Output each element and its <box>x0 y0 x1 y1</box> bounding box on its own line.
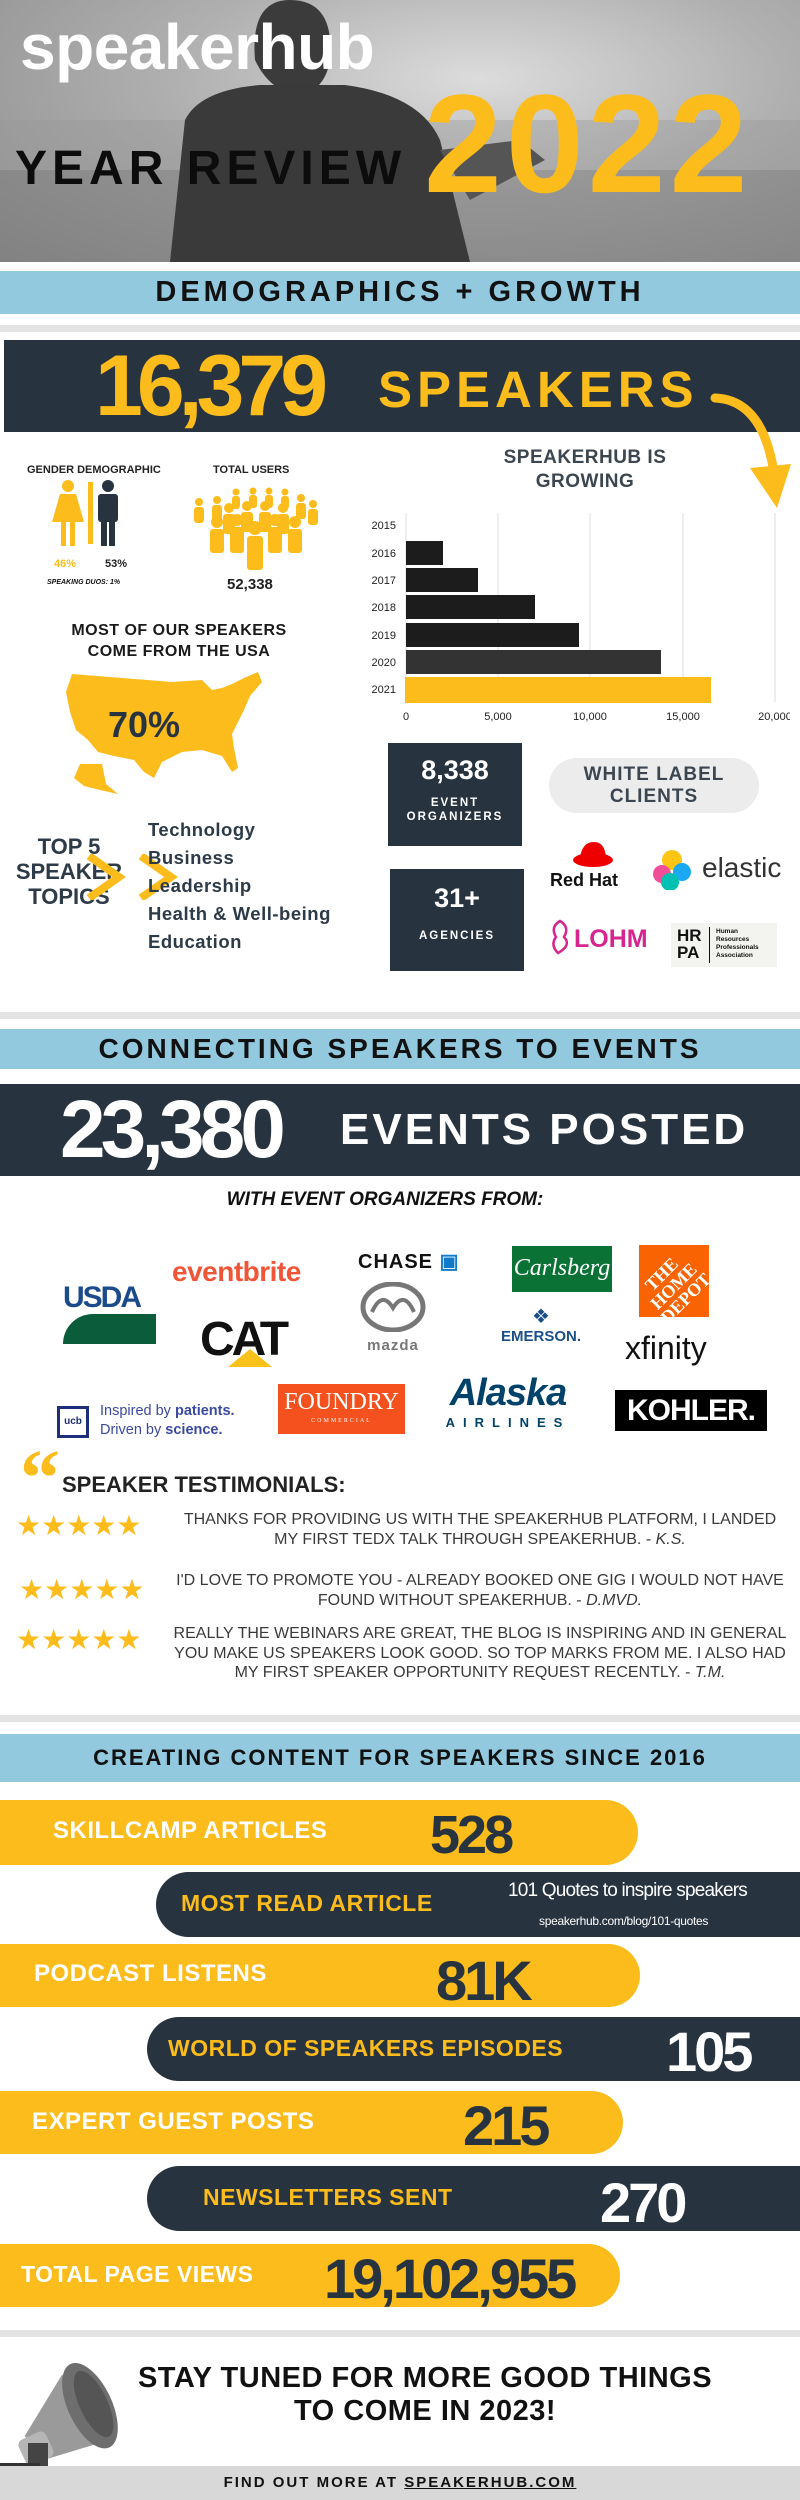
logo: lohm <box>552 920 648 954</box>
icon: crowd <box>194 488 318 570</box>
panel: gender demographic: SPEAKING DUOS: 1% <box>47 579 120 586</box>
chart title: SPEAKERHUB IS <box>504 447 666 468</box>
map: USA 70% <box>66 672 262 794</box>
logo: emerson: EMERSON. <box>501 1328 581 1345</box>
heading: most speakers from USA: COME FROM THE USA <box>88 643 270 660</box>
chart: speakerhub is growing: 2016 <box>372 548 396 560</box>
logo: hrpa: HR <box>677 926 702 945</box>
logo: hrpa: Human <box>716 928 738 935</box>
bar: podcast listens: 81K <box>436 1949 530 2012</box>
testimonial 3: YOU MAKE US SPEAKERS LOOK GOOD. SO TOP MARKS FROM ME. I ALSO HAD <box>174 1644 786 1662</box>
testimonial 1: MY FIRST TEDX TALK THROUGH SPEAKERHUB. - K.S. <box>274 1530 686 1548</box>
bar: total page views <box>0 2244 620 2307</box>
logo: alaska airlines: AIRLINES <box>446 1415 570 1430</box>
logo: speakerhub: speakerhub <box>20 11 374 83</box>
chart: speakerhub is growing: 2018 <box>372 602 396 614</box>
bar: most read article <box>156 1872 800 1937</box>
arrow: curved yellow <box>710 394 791 508</box>
logos: event organizers <box>57 1245 767 1438</box>
heading: with event organizers from: WITH EVENT ORGANIZERS FROM: <box>227 1189 543 1210</box>
chart: speakerhub is growing: 2020 <box>372 657 396 669</box>
bar: most read article: 101 Quotes to inspire speakers <box>508 1880 747 1901</box>
icon: megaphone <box>0 2363 118 2466</box>
icon: chevrons <box>86 854 178 900</box>
bar: most read article: speakerhub.com/blog/101-quotes <box>539 1914 708 1928</box>
stat box: event organizers: EVENT <box>431 797 479 809</box>
bar: podcast listens: PODCAST LISTENS <box>34 1960 267 1987</box>
logo: ucb: Driven by science. <box>100 1422 223 1438</box>
chart: speakerhub is growing: 15,000 <box>666 711 700 723</box>
title: year review: YEAR REVIEW <box>15 142 406 195</box>
logo: elastic: elastic <box>702 852 781 883</box>
chart: speakerhub is growing: 10,000 <box>573 711 607 723</box>
testimonial 3: MY FIRST SPEAKER OPPORTUNITY REQUEST RECENTLY. - T.M. <box>235 1664 725 1681</box>
heading: top 5: TOP 5 <box>38 834 100 859</box>
logo: red hat <box>550 842 618 890</box>
chart: speakerhub is growing: 2019 <box>372 630 396 642</box>
logo: kohler <box>615 1390 767 1431</box>
testimonial 3 <box>16 1624 786 1681</box>
chart: speakerhub is growing: 2017 <box>372 575 396 587</box>
heading: top 5: TOPICS <box>28 884 110 909</box>
list: topics <box>148 819 331 952</box>
logo: mazda <box>360 1282 426 1354</box>
events banner <box>0 1084 800 1176</box>
testimonial 2: ★★★★★ <box>19 1574 145 1605</box>
logo: lohm: LOHM <box>574 925 648 953</box>
heading: top 5 <box>16 834 122 909</box>
logo: usda: USDA <box>63 1281 140 1314</box>
bar: skillcamp articles: 528 <box>430 1805 511 1865</box>
bar: expert guest posts: 215 <box>463 2094 547 2157</box>
logo: eventbrite: eventbrite <box>172 1256 301 1287</box>
logo: elastic <box>653 850 781 890</box>
icon: woman and man <box>52 480 118 546</box>
panel: gender demographic: 46% <box>54 558 76 570</box>
logo: alaska airlines <box>446 1372 570 1430</box>
bar: newsletters sent: 270 <box>600 2171 684 2234</box>
testimonial 1: THANKS FOR PROVIDING US WITH THE SPEAKERHUB PLATFORM, I LANDED <box>184 1511 776 1528</box>
logo: foundry: COMMERCIAL <box>311 1418 372 1424</box>
stat box: event organizers: ORGANIZERS <box>407 811 503 823</box>
logo: home depot: HOME <box>646 1259 701 1313</box>
bar: expert guest posts <box>0 2091 623 2154</box>
testimonial 1: ★★★★★ <box>16 1510 142 1541</box>
panel: total users <box>194 464 318 593</box>
panel: total users: 52,338 <box>227 576 273 593</box>
callout: stay tuned: STAY TUNED FOR MORE GOOD THINGS <box>138 2362 712 2394</box>
bar: newsletters sent <box>147 2166 800 2231</box>
logo: home depot <box>639 1245 709 1317</box>
panel: total users: TOTAL USERS <box>213 464 289 476</box>
header photo <box>0 0 800 262</box>
footer <box>0 2466 800 2500</box>
speakers number: 16,379 <box>95 338 322 434</box>
logo: chase: CHASE ▣ <box>358 1251 459 1273</box>
icon: quote marks: “ <box>20 1435 60 1523</box>
logo: red hat: Red Hat <box>550 870 618 890</box>
map: USA 70%: 70% <box>108 704 180 745</box>
logo: carlsberg <box>512 1246 612 1292</box>
speakers label: SPEAKERS <box>378 361 699 418</box>
panel: gender demographic: GENDER DEMOGRAPHIC <box>27 464 161 476</box>
chart: speakerhub is growing: 5,000 <box>484 711 512 723</box>
section heading: creating content <box>0 1734 800 1782</box>
chart: speakerhub is growing: 2021 <box>372 684 396 696</box>
testimonial 3: REALLY THE WEBINARS ARE GREAT, THE BLOG IS INSPIRING AND IN GENERAL <box>174 1625 786 1642</box>
panel: gender demographic: 53% <box>105 558 127 570</box>
section heading: demographics + growth: DEMOGRAPHICS + GROWTH <box>155 276 645 308</box>
title: 2022: 2022 <box>424 65 751 222</box>
logo: hrpa: Resources <box>716 936 749 943</box>
logo: carlsberg: Carlsberg <box>514 1255 610 1281</box>
speakers banner <box>4 340 800 432</box>
logo: hrpa: PA <box>677 943 699 962</box>
logo: ucb: ucb <box>64 1416 82 1427</box>
stat box: agencies: 31+ <box>434 883 480 913</box>
stat box: event organizers <box>388 743 522 846</box>
heading: most speakers from USA <box>71 622 287 660</box>
logo: kohler: KOHLER. <box>627 1394 755 1427</box>
bar: world of speakers episodes: 105 <box>666 2020 750 2083</box>
logo: ucb: Inspired by patients. <box>100 1403 235 1419</box>
stat box: event organizers: 8,338 <box>421 755 489 785</box>
logo: usda <box>63 1281 156 1344</box>
logo: foundry <box>278 1384 405 1434</box>
logo: hrpa <box>671 923 777 967</box>
testimonial 2: I'D LOVE TO PROMOTE YOU - ALREADY BOOKED ONE GIG I WOULD NOT HAVE <box>176 1572 784 1589</box>
logo: hrpa: Association <box>716 952 753 959</box>
pill: white label clients: WHITE LABEL <box>584 764 724 785</box>
testimonial 1 <box>16 1510 776 1548</box>
logo: emerson: ❖ <box>532 1306 550 1328</box>
heading: most speakers from USA: MOST OF OUR SPEAKERS <box>71 622 287 639</box>
pill: white label clients <box>549 758 759 813</box>
bar: skillcamp articles <box>0 1800 638 1865</box>
section heading: connecting speakers to events: CONNECTING SPEAKERS TO EVENTS <box>98 1033 702 1064</box>
footer: FIND OUT MORE AT SPEAKERHUB.COM <box>224 2474 576 2491</box>
bar: most read article: MOST READ ARTICLE <box>181 1890 433 1916</box>
panel: gender demographic <box>27 464 161 586</box>
bar: world of speakers episodes <box>147 2017 800 2081</box>
section heading: connecting speakers to events <box>0 1029 800 1069</box>
panel: top 5 speaker topics <box>16 819 331 952</box>
logo: ucb <box>57 1403 235 1438</box>
list: topics: Leadership <box>148 875 252 896</box>
bar: total page views: 19,102,955 <box>324 2247 574 2310</box>
heading: top 5: SPEAKER <box>16 859 122 884</box>
bar: world of speakers episodes: WORLD OF SPEAKERS EPISODES <box>168 2035 563 2061</box>
logo: hrpa: Professionals <box>716 944 759 951</box>
callout: stay tuned <box>138 2362 712 2427</box>
logo: mazda: mazda <box>367 1337 419 1354</box>
stat box: agencies <box>390 869 524 971</box>
logo: home depot: THE <box>641 1254 682 1295</box>
chart: speakerhub is growing: 0 <box>403 711 409 723</box>
section heading: demographics + growth <box>0 271 800 314</box>
bar: skillcamp articles: SKILLCAMP ARTICLES <box>53 1817 327 1844</box>
chart title <box>504 447 666 492</box>
chart: speakerhub is growing: 2015 <box>372 520 396 532</box>
logo: xfinity: xfinity <box>625 1330 707 1366</box>
list: topics: Technology <box>148 819 255 840</box>
heading: speaker testimonials: SPEAKER TESTIMONIALS: <box>62 1472 346 1497</box>
pill: white label clients: CLIENTS <box>610 786 698 807</box>
list: topics: Education <box>148 931 242 952</box>
panel: testimonials <box>16 1435 786 1681</box>
bar: expert guest posts: EXPERT GUEST POSTS <box>32 2108 314 2135</box>
logo: cat: CAT <box>200 1313 286 1366</box>
testimonial 2: FOUND WITHOUT SPEAKERHUB. - D.MVD. <box>318 1592 642 1608</box>
bar: total page views: TOTAL PAGE VIEWS <box>21 2261 254 2287</box>
section heading: creating content: CREATING CONTENT FOR SPEAKERS SINCE 2016 <box>93 1745 707 1770</box>
stat box: agencies: AGENCIES <box>419 930 495 942</box>
bar: newsletters sent: NEWSLETTERS SENT <box>203 2184 453 2210</box>
testimonial 2 <box>19 1572 784 1608</box>
chart: speakerhub is growing <box>372 447 790 723</box>
list: topics: Health & Well-being <box>148 903 331 924</box>
events number: 23,380 <box>60 1084 281 1175</box>
logo: foundry: FOUNDRY <box>284 1389 399 1415</box>
logo: emerson <box>501 1306 581 1345</box>
callout: stay tuned: TO COME IN 2023! <box>294 2395 556 2427</box>
testimonial 3: ★★★★★ <box>16 1624 142 1655</box>
events label: EVENTS POSTED <box>340 1105 748 1154</box>
logo: alaska airlines: Alaska <box>450 1372 566 1414</box>
list: topics: Business <box>148 847 234 868</box>
bar: podcast listens <box>0 1944 640 2007</box>
chart title: GROWING <box>536 471 634 492</box>
